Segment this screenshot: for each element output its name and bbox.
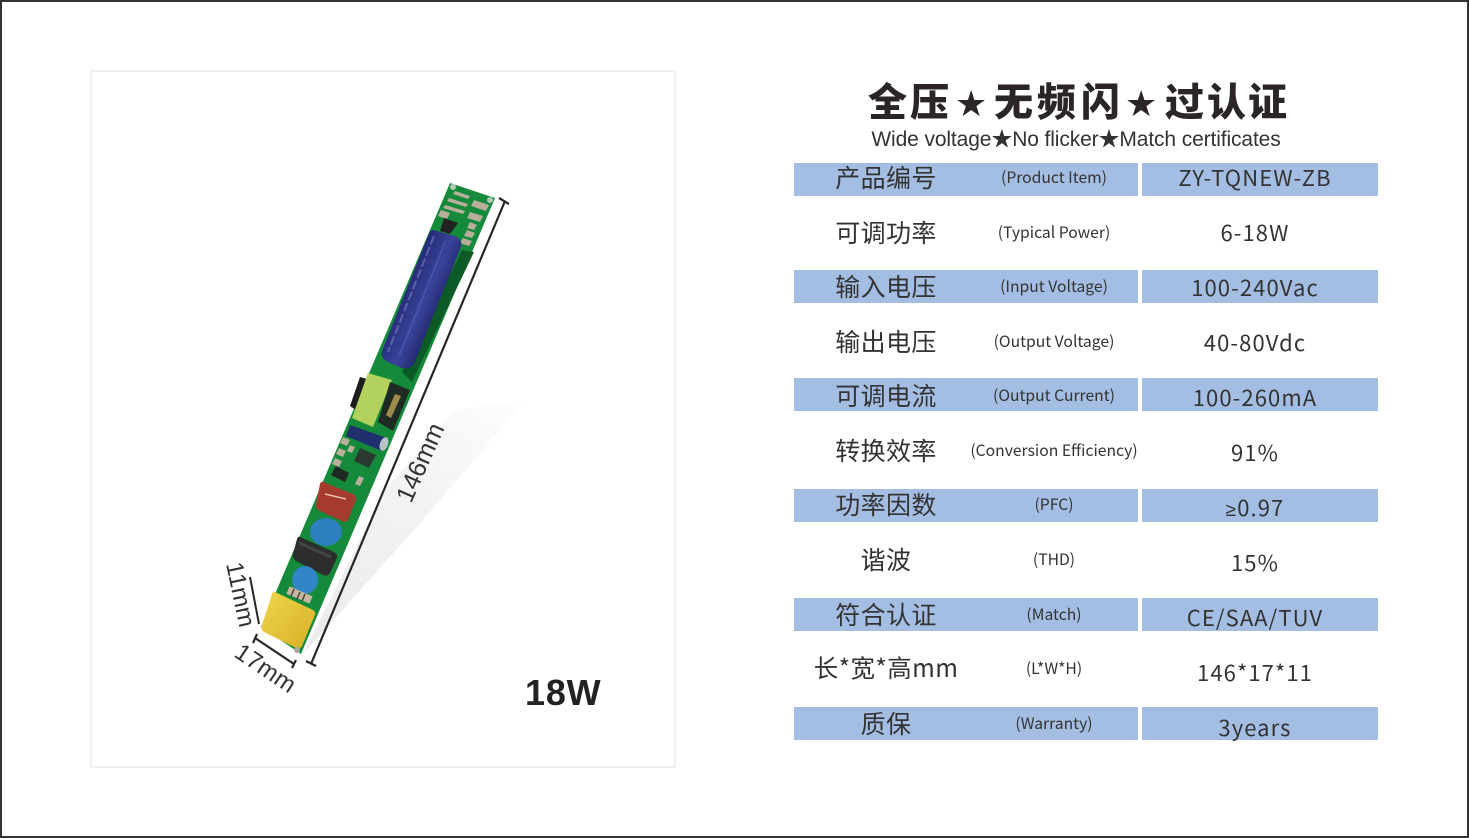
row: input voltage: 输入电压: [835, 268, 937, 304]
capacitor: red film: [316, 482, 356, 522]
row: warranty: 质保: [861, 705, 911, 741]
heading: Chinese title: ★: [1125, 84, 1157, 125]
surface components: [332, 191, 489, 486]
row: warranty: 3years: [1218, 711, 1292, 743]
row: dimensions: (L*W*H): [1026, 656, 1082, 679]
label: wattage: 18W: [525, 672, 601, 713]
capacitor: blue electrolytic: [382, 230, 461, 368]
resistor: [288, 589, 311, 601]
row: match: 符合认证: [835, 596, 937, 632]
row: warranty: [794, 705, 1378, 743]
row: product item: (Product Item): [1001, 165, 1107, 188]
row: match: [794, 596, 1378, 633]
row: match: CE/SAA/TUV: [1187, 601, 1323, 633]
row: output current: [794, 377, 1378, 413]
row: THD: [861, 541, 1279, 578]
row: output voltage: (Output Voltage): [994, 329, 1114, 352]
row: output current: (Output Current): [993, 383, 1115, 406]
row: product item: 产品编号: [835, 159, 937, 195]
row: input voltage: [794, 268, 1378, 304]
row: THD: 15%: [1231, 546, 1279, 578]
row: input voltage: (Input Voltage): [1000, 274, 1108, 297]
row: typical power: (Typical Power): [998, 220, 1110, 243]
row: output current: 100-260mA: [1193, 381, 1317, 413]
dimension: width: [253, 634, 296, 668]
small capacitor: [346, 425, 390, 452]
row: dimensions: [814, 650, 1313, 688]
row: conversion efficiency: 91%: [1231, 436, 1279, 468]
heading: Chinese title: 全压: [868, 72, 949, 128]
row: conversion efficiency: (Conversion Efficiency): [970, 438, 1138, 461]
row: match: (Match): [1026, 602, 1082, 625]
row: typical power: [835, 214, 1290, 250]
transformer: [350, 373, 410, 431]
capacitor: blue disc: [310, 518, 342, 546]
row: dimensions: 146*17*11: [1197, 656, 1313, 688]
dimension label: 146mm: 146mm: [391, 419, 450, 506]
row: PFC: ≥0.97: [1226, 491, 1284, 523]
row: THD: (THD): [1033, 547, 1075, 570]
row: warranty: (Warranty): [1015, 711, 1093, 734]
row: product item: ZY-TQNEW-ZB: [1178, 161, 1332, 193]
row: PFC: (PFC): [1034, 492, 1074, 515]
heading: Chinese title: 无频闪: [994, 72, 1120, 128]
dimension: height: [250, 577, 259, 624]
row: PFC: 功率因数: [835, 486, 937, 522]
dimension label: 11mm: 11mm: [220, 560, 260, 630]
subtitle: Wide voltage★No flicker★Match certificates: [871, 128, 1281, 151]
row: output voltage: [835, 323, 1306, 359]
circuit board: [261, 183, 495, 654]
heading: Chinese title: [868, 72, 1287, 128]
panel: product photo: [90, 70, 676, 768]
heading: Chinese title: ★: [955, 84, 987, 125]
row: output current: 可调电流: [835, 377, 937, 413]
row: typical power: 可调功率: [835, 214, 937, 250]
row: output voltage: 输出电压: [835, 323, 937, 359]
row: conversion efficiency: 转换效率: [835, 432, 937, 468]
capacitor: yellow box: [261, 592, 315, 653]
row: THD: 谐波: [861, 541, 911, 577]
chip: [440, 218, 458, 234]
heading: Chinese title: 过认证: [1165, 72, 1287, 128]
inductor: black: [293, 537, 337, 576]
row: input voltage: 100-240Vac: [1191, 271, 1319, 303]
row: conversion efficiency: [835, 432, 1279, 468]
row: dimensions: 长*宽*高mm: [814, 650, 958, 685]
board shadow: [303, 400, 525, 654]
dimension: length: [306, 198, 509, 666]
row: product item: [794, 159, 1378, 196]
row: typical power: 6-18W: [1220, 216, 1290, 248]
row: PFC: [794, 486, 1378, 523]
dimension label: 17mm: 17mm: [230, 639, 301, 699]
row: output voltage: 40-80Vdc: [1204, 326, 1306, 358]
capacitor: blue disc lower: [292, 566, 318, 594]
